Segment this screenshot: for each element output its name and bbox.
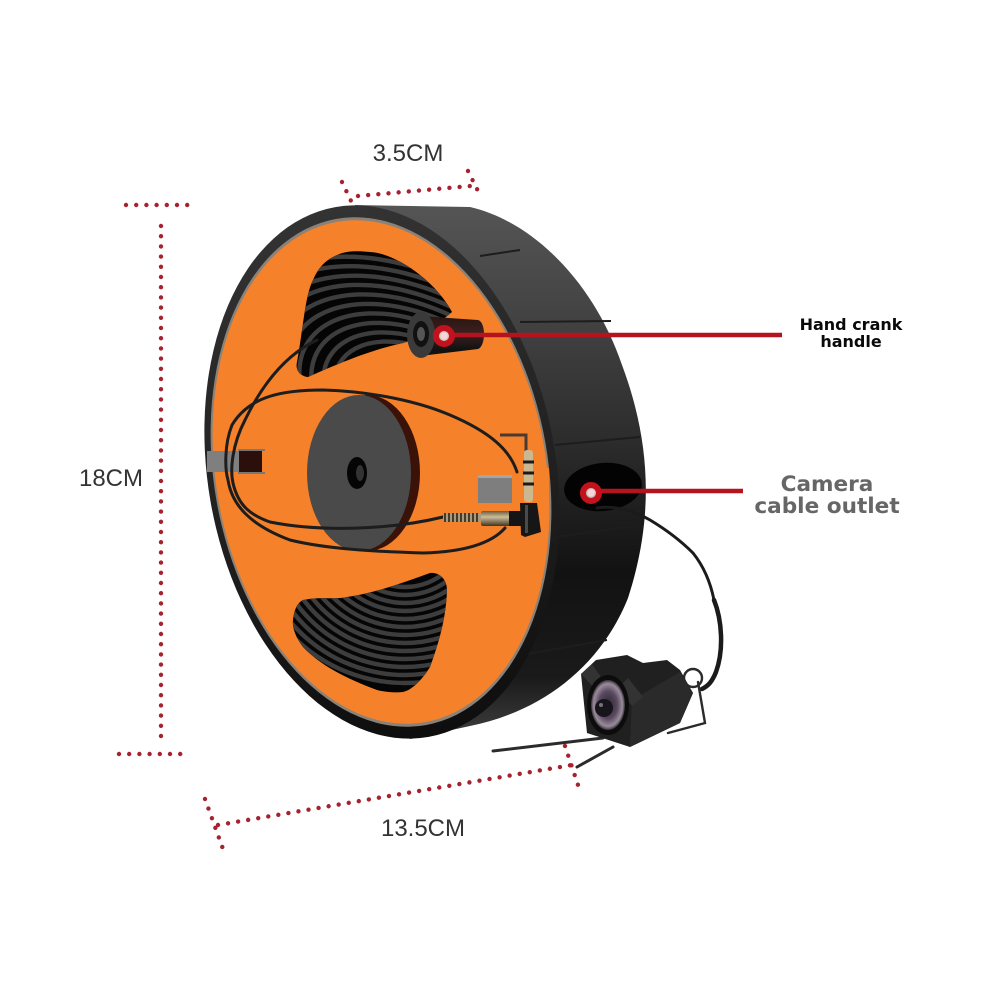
- label: 13.5CM: 13.5CM: [381, 815, 465, 842]
- rim inner ring: [172, 190, 590, 754]
- dimension: height 18CM: [119, 205, 190, 754]
- four pole jack plug: [520, 450, 541, 537]
- reel body side wall: [355, 205, 646, 739]
- dimension: width 3.5CM: [342, 171, 479, 203]
- camera cable: [597, 507, 721, 689]
- callout line: hand crank handle: [436, 328, 782, 344]
- orange side tab: [539, 468, 549, 512]
- lower cable vent: [292, 572, 447, 692]
- central hub disc: [307, 395, 420, 551]
- left cable clip: [207, 450, 265, 473]
- label: Hand crank handle: Hand crank: [800, 315, 903, 334]
- upper bracket: [500, 435, 526, 455]
- right cable clip: [478, 475, 512, 503]
- upper cable vent: [296, 251, 452, 377]
- camera wire stand: [493, 669, 705, 767]
- camera housing: [581, 655, 693, 747]
- orange face plate: [174, 193, 588, 751]
- callout line: camera cable outlet: [583, 485, 743, 501]
- coiled cable: [226, 340, 517, 553]
- label: Camera cable outlet: cable outlet: [754, 494, 900, 519]
- hand crank handle: [407, 312, 484, 358]
- label: Camera cable outlet: Camera: [781, 472, 873, 497]
- reel face rim: [164, 177, 600, 767]
- label: 18CM: 18CM: [79, 465, 143, 492]
- angled audio plug: [443, 511, 523, 526]
- cable outlet opening: [562, 459, 644, 515]
- label: 3.5CM: 3.5CM: [373, 140, 443, 167]
- dimension: depth 13.5CM: [205, 746, 578, 849]
- label: Hand crank handle: handle: [820, 332, 882, 351]
